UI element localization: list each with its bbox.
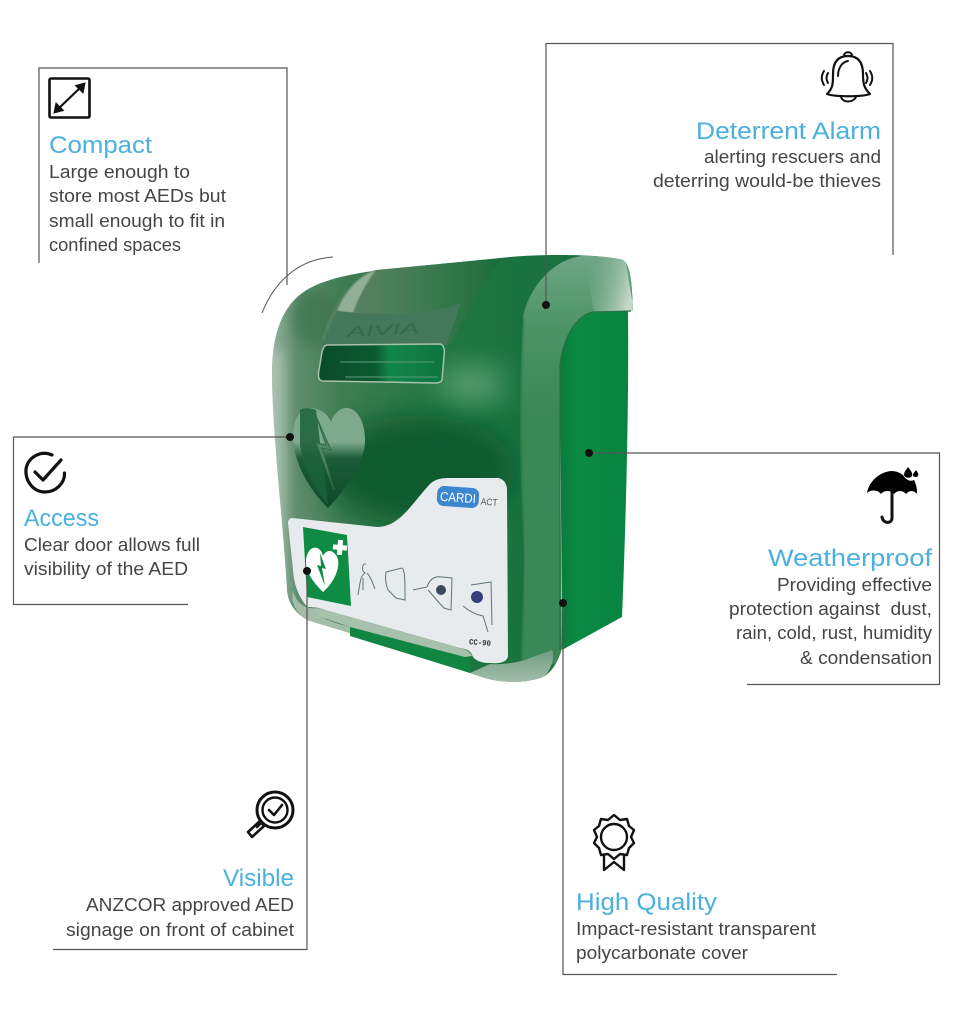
icon: resize arrows: [50, 78, 90, 118]
recess light strip: [337, 270, 376, 313]
bottom handle: [350, 627, 471, 673]
curve accent: [262, 257, 333, 313]
text: visible description: signage on front of cabinet: [66, 920, 294, 940]
cabinet translucent cover: [272, 255, 633, 682]
text: access description: Clear door allows full: [24, 535, 200, 555]
text: access description: visibility of the AED: [24, 559, 188, 579]
brand embossed text: AIVIA: [345, 320, 419, 341]
right side band: [520, 255, 633, 680]
logo suffix: ACT: [480, 497, 498, 509]
heading: deterrent alarm: Deterrent Alarm: [696, 118, 881, 145]
text: weatherproof description: rain, cold, rust, humidity: [736, 623, 932, 643]
icon: magnifier: [248, 792, 293, 837]
band dark edge: [520, 317, 524, 680]
dark mass behind label: [325, 415, 515, 525]
icon: rosette ribbon: [594, 815, 634, 870]
sign plus: [332, 539, 348, 556]
panel: high quality: [559, 599, 837, 974]
pale corner: [590, 257, 633, 312]
text: visible description: ANZCOR approved AED: [86, 895, 294, 915]
text: weatherproof description: protection against dust,: [729, 599, 932, 619]
pale lower left edge: [272, 347, 289, 598]
AED sign: [303, 527, 351, 606]
CARDI ACT logo: [436, 486, 499, 510]
panel: visible: [53, 567, 311, 950]
heading: weatherproof: Weatherproof: [768, 545, 932, 572]
lower rim: [470, 650, 553, 682]
text: compact description: [49, 162, 226, 255]
top recess: [322, 258, 503, 345]
text: deterrent alarm description: [653, 147, 881, 191]
text: visible description: [66, 895, 294, 940]
pictogram opening: [413, 577, 452, 610]
text: deterrent alarm description: deterring would-be thieves: [653, 171, 881, 191]
bottom lip: [315, 608, 472, 657]
logo text: CARDI: [439, 489, 476, 506]
side panel edge: [560, 311, 631, 650]
text: high quality description: [576, 919, 816, 963]
text: access description: [24, 535, 200, 579]
icon: bell: [822, 52, 872, 102]
text: compact description: store most AEDs but: [49, 186, 226, 206]
marker: high quality: [559, 599, 567, 607]
pictogram removal: [463, 582, 492, 632]
door heart: [293, 408, 365, 508]
window slot: [318, 344, 444, 383]
model code: CC-90: [469, 638, 491, 649]
window inner lines: [340, 362, 438, 377]
panel: access: [14, 433, 294, 604]
door heart left dark band: [300, 408, 328, 505]
cabinet photo: [262, 255, 634, 682]
heading: access: Access: [24, 505, 99, 532]
brand strip: [322, 303, 461, 345]
heading: high quality: High Quality: [576, 889, 717, 916]
text: compact description: small enough to fit in: [49, 211, 225, 231]
frame: compact: [39, 68, 287, 285]
marker: deterrent alarm: [542, 301, 550, 309]
logo badge: [436, 486, 480, 508]
highlight: [438, 364, 506, 404]
marker: visible: [303, 567, 311, 575]
pictogram person: [358, 564, 375, 595]
pictogram cabinet: [386, 568, 405, 600]
text: compact description: confined spaces: [49, 235, 181, 255]
door heart bolt: [316, 416, 334, 490]
sign background: [303, 527, 351, 606]
heading: visible: Visible: [223, 865, 294, 892]
text: compact description: Large enough to: [49, 162, 190, 182]
sign heart: [306, 548, 338, 592]
cover shading: [262, 255, 634, 680]
text: weatherproof description: Providing effective: [777, 575, 932, 595]
marker: weatherproof: [585, 449, 593, 457]
icon: check circle: [26, 453, 65, 492]
panel: compact: [39, 68, 333, 313]
text: high quality description: polycarbonate cover: [576, 943, 748, 963]
instruction pictograms: [358, 564, 492, 632]
text: deterrent alarm description: alerting rescuers and: [704, 147, 881, 167]
heading: compact: Compact: [49, 132, 152, 159]
frame: high quality: [563, 603, 837, 974]
frame: weatherproof: [589, 453, 940, 684]
icon: umbrella: [867, 467, 918, 522]
instruction label: [288, 478, 508, 663]
text: weatherproof description: [729, 575, 932, 668]
top left shade: [293, 290, 337, 346]
frame: visible: [53, 571, 307, 950]
marker: access: [286, 433, 294, 441]
sign bolt: [317, 553, 326, 586]
panel: deterrent alarm: [542, 44, 893, 309]
text: weatherproof description: & condensation: [800, 648, 932, 668]
frame: deterrent alarm: [546, 44, 893, 305]
lower left rim: [292, 590, 350, 633]
text: high quality description: Impact-resistant transparent: [576, 919, 816, 939]
cabinet side panel: [560, 311, 628, 650]
panel: weatherproof: [585, 449, 940, 684]
frame: access: [14, 437, 290, 604]
